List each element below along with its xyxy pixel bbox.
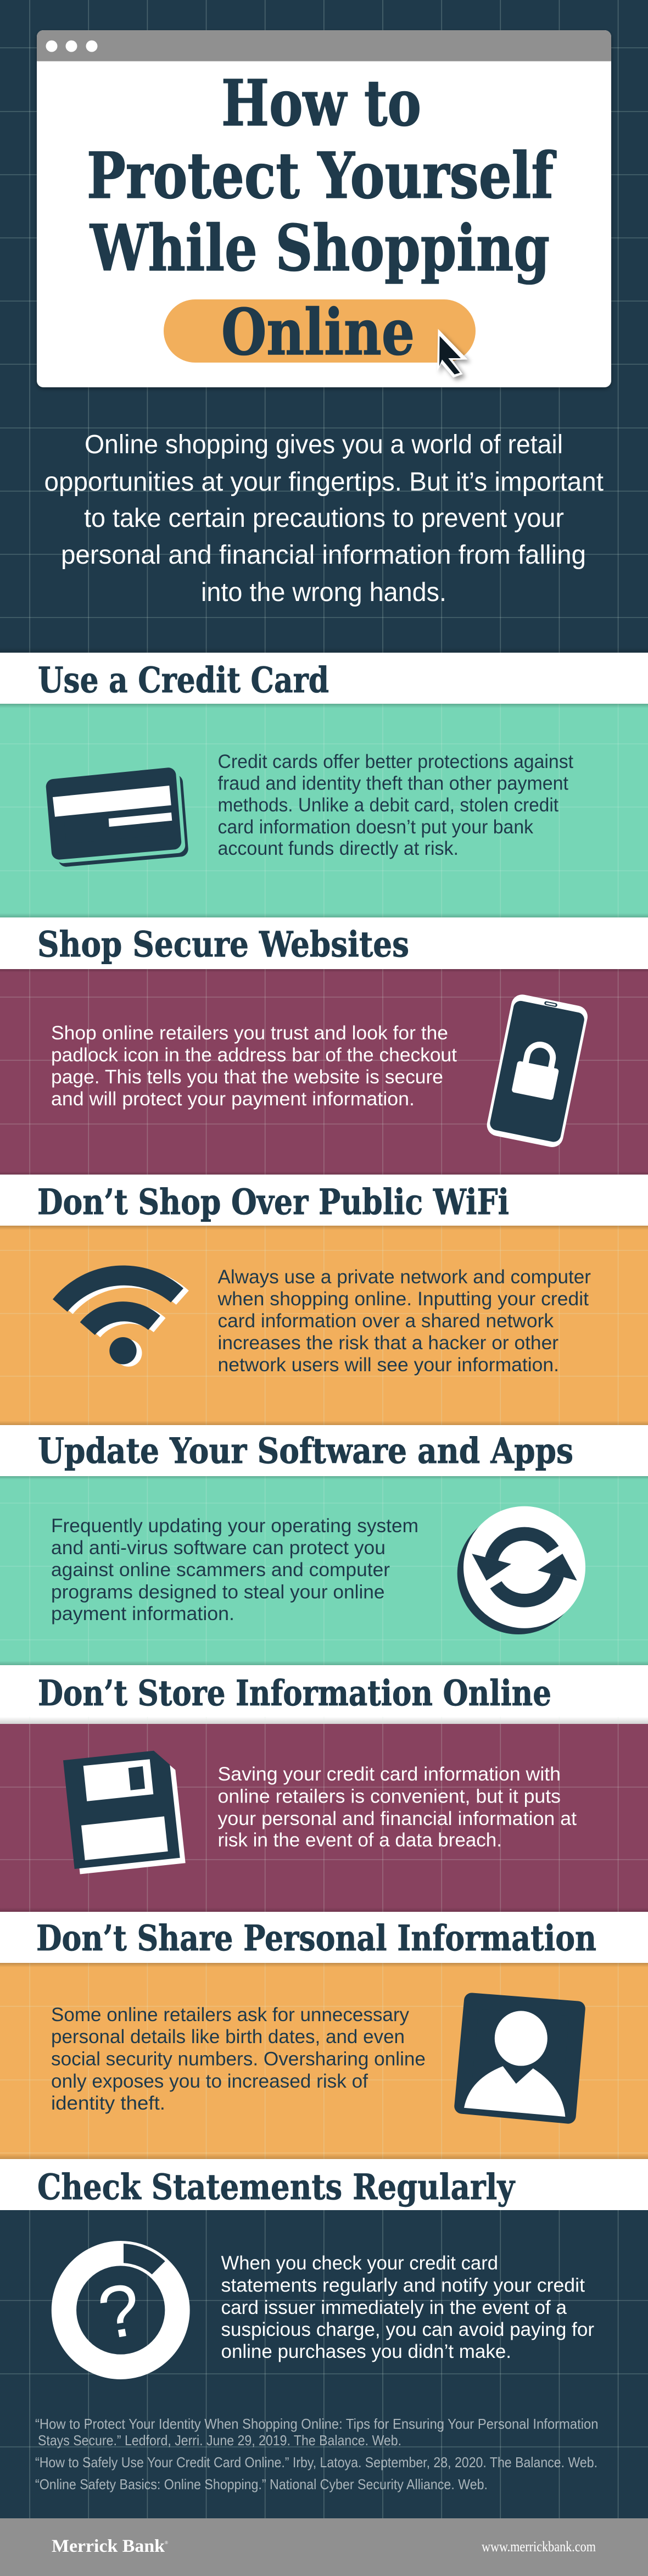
icon: sync arrows — [457, 1506, 585, 1634]
body text: card issuer immediately in the event of a — [221, 2297, 567, 2318]
heading: shop secure websites — [0, 917, 648, 969]
references — [35, 2416, 599, 2492]
browser window — [37, 30, 611, 389]
body text: statements regularly and notify your credit — [221, 2274, 585, 2296]
icon: question ring: ? — [92, 2268, 147, 2356]
intro text: into the wrong hands. — [201, 578, 446, 607]
references: “How to Protect Your Identity When Shopping Online: Tips for Ensuring Your Personal Information — [35, 2416, 599, 2432]
body text — [217, 1763, 577, 1851]
body text: Saving your credit card information with — [217, 1763, 561, 1785]
body text: risk in the event of a data breach. — [217, 1829, 502, 1851]
panel: update software — [0, 1476, 648, 1665]
panel: share personal information — [0, 1963, 648, 2159]
body text — [51, 1515, 418, 1624]
body text: identity theft. — [51, 2093, 165, 2114]
body text: Shop online retailers you trust and look for the — [51, 1022, 448, 1044]
body text — [217, 751, 573, 859]
title: Protect Yourself — [87, 139, 556, 213]
heading: use a credit card — [0, 653, 648, 704]
heading: check statements: Check Statements Regularly — [37, 2167, 516, 2208]
title — [87, 66, 556, 286]
icon: floppy disk — [63, 1751, 186, 1874]
body text: fraud and identity theft than other payment — [217, 772, 568, 794]
panel: use a credit card — [0, 704, 648, 917]
icon: wifi — [53, 1265, 189, 1367]
icon: question ring — [64, 2244, 177, 2367]
heading: shop secure websites: Shop Secure Websites — [37, 924, 409, 965]
body text: card information over a shared network — [217, 1310, 554, 1332]
body text: card information doesn’t put your bank — [217, 816, 533, 838]
body text: online retailers is convenient, but it puts — [217, 1785, 561, 1807]
heading: public wifi: Don’t Shop Over Public WiFi — [37, 1182, 509, 1223]
body text: programs designed to steal your online — [51, 1581, 384, 1603]
panel: check statements — [0, 2210, 648, 2518]
registered mark: ® — [165, 2540, 168, 2545]
body text: personal details like birth dates, and even — [51, 2026, 405, 2048]
body text: page. This tells you that the website is secure — [51, 1066, 443, 1088]
body text: and will protect your payment information. — [51, 1088, 415, 1110]
panel: header and introduction — [0, 0, 648, 653]
body text: online purchases you didn’t make. — [221, 2341, 511, 2362]
body text: network users will see your information. — [217, 1354, 559, 1376]
body text — [51, 1022, 457, 1110]
body text — [217, 1266, 591, 1376]
body text: methods. Unlike a debit card, stolen credit — [217, 794, 558, 816]
body text: Always use a private network and computer — [217, 1266, 591, 1288]
references: “Online Safety Basics: Online Shopping.” National Cyber Security Alliance. Web. — [35, 2476, 488, 2492]
body text: payment information. — [51, 1603, 234, 1624]
body text: your personal and financial information at — [217, 1808, 577, 1829]
online pill: Online — [221, 296, 415, 370]
body text: social security numbers. Oversharing online — [51, 2048, 426, 2070]
body text: increases the risk that a hacker or other — [217, 1332, 558, 1354]
body text: account funds directly at risk. — [217, 838, 459, 859]
body text: when shopping online. Inputting your credit — [217, 1288, 589, 1310]
panel: store information — [0, 1717, 648, 1912]
body text — [221, 2252, 594, 2362]
body text: only exposes you to increased risk of — [51, 2071, 368, 2092]
body text: padlock icon in the address bar of the checkout — [51, 1044, 457, 1066]
references: Stays Secure.” Ledford, Jerri. June 29, 2019. The Balance. Web. — [38, 2432, 401, 2449]
intro text: opportunities at your fingertips. But it’s important — [44, 468, 604, 497]
intro text: Online shopping gives you a world of retail — [85, 430, 563, 459]
heading: store information: Don’t Store Information Online — [38, 1673, 551, 1714]
heading: use a credit card: Use a Credit Card — [38, 660, 329, 701]
footer — [0, 2518, 648, 2576]
logo: merrick bank: Merrick Bank — [52, 2536, 165, 2556]
body text: Credit cards offer better protections against — [217, 751, 573, 772]
heading: check statements — [0, 2159, 648, 2210]
body text: Frequently updating your operating system — [51, 1515, 418, 1537]
icon: mouse cursor — [437, 329, 471, 380]
body text: and anti-virus software can protect you — [51, 1537, 386, 1559]
intro text — [44, 430, 604, 607]
body text — [51, 2004, 426, 2114]
icon: credit card — [53, 775, 181, 859]
intro text: to take certain precautions to prevent your — [84, 504, 564, 533]
website url: www.merrickbank.com — [482, 2539, 596, 2555]
icon: phone with padlock — [485, 993, 590, 1149]
icon: person id — [462, 2001, 578, 2117]
body text: When you check your credit card — [221, 2252, 498, 2274]
panel: shop secure websites — [0, 969, 648, 1175]
body text: against online scammers and computer — [51, 1559, 390, 1581]
window title bar — [37, 30, 611, 62]
window dots — [46, 41, 98, 52]
title: How to — [221, 66, 421, 141]
body text: Some online retailers ask for unnecessary — [51, 2004, 409, 2026]
panel: public wifi — [0, 1226, 648, 1425]
heading: update software: Update Your Software and Apps — [38, 1431, 573, 1472]
body text: suspicious charge, you can avoid paying for — [221, 2319, 594, 2340]
intro text: personal and financial information from falling — [61, 541, 586, 570]
title: While Shopping — [89, 212, 550, 286]
